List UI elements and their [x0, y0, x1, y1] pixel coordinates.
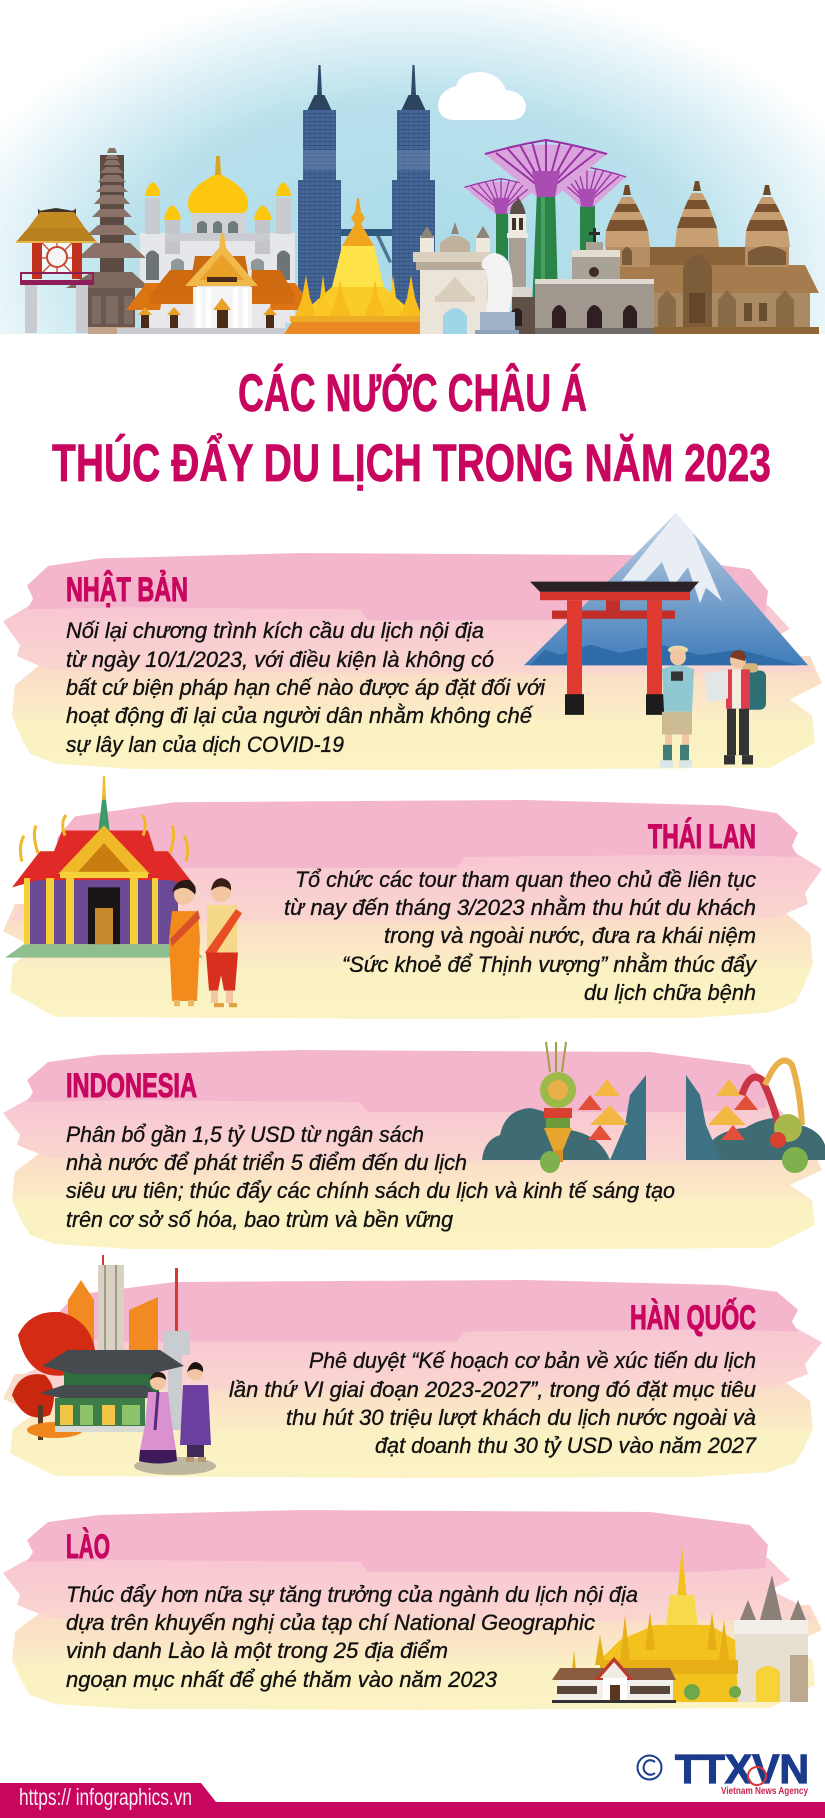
Patuxay arch: [413, 222, 490, 334]
white cloud: [438, 72, 526, 120]
body text: sự lây lan của dịch COVID-19: [66, 732, 344, 757]
couple in hanbok: [134, 1362, 216, 1475]
red pavilion: [16, 208, 97, 333]
heading: INDONESIA: [66, 1067, 197, 1105]
body text: bất cứ biện pháp hạn chế nào được áp đặt đối với: [66, 675, 546, 700]
body text: vinh danh Lào là một trong 25 địa điểm: [66, 1638, 448, 1663]
Shwedagon pagoda: [284, 198, 433, 334]
body text: trên cơ sở số hóa, bao trùm và bền vững: [66, 1207, 454, 1232]
panel: Nhật Bản: [3, 513, 822, 770]
panel: Lào: [3, 1510, 822, 1710]
footer bar with website: https:// infographics.vn: [19, 1784, 192, 1810]
body text: Nối lại chương trình kích cầu du lịch nội địa: [66, 618, 484, 643]
body text: từ ngày 10/1/2023, với điều kiện là không có: [66, 647, 494, 672]
hall: [552, 1657, 676, 1703]
Korean palace: [40, 1350, 184, 1432]
illustration: That Luang stupa, Patuxai and hall: [552, 1545, 808, 1703]
illustration: Thai temple and couple in traditional dress: [5, 776, 242, 1007]
tourist with map and backpack: [704, 650, 766, 764]
penjor decoration: [742, 1060, 808, 1173]
title: [52, 362, 771, 493]
title: CÁC NƯỚC CHÂU Á: [238, 362, 587, 423]
body text: [66, 1582, 638, 1692]
offering tower: [540, 1042, 576, 1173]
Patuxai gate: [734, 1575, 808, 1702]
faded cloud top left: [33, 9, 114, 46]
body text: [284, 867, 758, 1005]
brush background: [3, 1280, 822, 1478]
faded cloud top right: [693, 7, 791, 46]
brush background: [3, 1050, 822, 1250]
illustration: Seoul skyline, palace and couple in hanbok: [12, 1255, 216, 1475]
left tower: [605, 185, 650, 247]
That Luang stupa: [571, 1545, 741, 1702]
body text: trong và ngoài nước, đưa ra khái niệm: [384, 923, 756, 948]
heading: HÀN QUỐC: [630, 1298, 756, 1337]
panel: Indonesia: [3, 1042, 825, 1250]
heading: NHẬT BẢN: [66, 571, 188, 609]
body text: [229, 1348, 757, 1458]
panel: Hàn Quốc: [3, 1255, 822, 1478]
body text: nhà nước để phát triển 5 điểm đến du lịch: [66, 1150, 467, 1175]
right tower: [745, 185, 790, 247]
body text: “Sức khoẻ để Thịnh vượng” nhằm thúc đẩy: [342, 952, 758, 977]
brush background: [3, 1510, 822, 1710]
panel: Thái Lan: [3, 776, 822, 1019]
footer bar with website: [0, 1783, 825, 1818]
illustration: Balinese gate and offerings: [482, 1042, 825, 1173]
umbrellas: [578, 1079, 758, 1140]
heading: THÁI LAN: [648, 818, 756, 856]
Singapore supertrees: [464, 140, 626, 334]
mosque: [140, 156, 295, 323]
body text: từ nay đến tháng 3/2023 nhằm thu hút du khách: [284, 895, 756, 920]
centre tower: [675, 181, 719, 247]
Thai temple: [117, 233, 316, 334]
sky background: [0, 0, 825, 334]
brush background: [3, 800, 822, 1019]
Petronas towers: [298, 65, 435, 334]
body text: Phê duyệt “Kế hoạch cơ bản về xúc tiến du lịch: [309, 1348, 756, 1373]
brush background: [3, 553, 822, 770]
church: [535, 228, 654, 334]
TTXVN logo: TTXVN: [675, 1746, 809, 1792]
pagoda: [66, 148, 150, 334]
man in red and yellow costume: [205, 878, 242, 1007]
body text: Thúc đẩy hơn nữa sự tăng trưởng của ngành du lịch nội địa: [66, 1582, 638, 1607]
body text: ngoạn mục nhất để ghé thăm vào năm 2023: [66, 1667, 498, 1692]
agency name: Vietnam News Agency: [721, 1786, 808, 1797]
body text: [66, 618, 546, 757]
body text: [66, 1122, 675, 1232]
body text: lần thứ VI giai đoạn 2023-2027”, trong đó đặt mục tiêu: [229, 1377, 756, 1402]
tourist with camera: [660, 646, 694, 768]
body text: hoạt động đi lại của người dân nhằm không chế: [66, 703, 534, 728]
woman in orange dress: [169, 880, 200, 1006]
copyright symbol: [638, 1756, 662, 1780]
body text: đạt doanh thu 30 tỷ USD vào năm 2027: [375, 1433, 757, 1458]
Merlion statue: [475, 253, 519, 334]
body text: thu hút 30 triệu lượt khách du lịch nước ngoài và: [286, 1405, 756, 1430]
heading: LÀO: [66, 1528, 110, 1566]
body text: du lịch chữa bệnh: [584, 980, 756, 1005]
illustration: Mount Fuji, torii gate and tourists: [524, 513, 808, 768]
body text: dựa trên khuyến nghị của tạp chí National Geographic: [66, 1610, 595, 1635]
Angkor Wat: [605, 181, 819, 334]
header illustration: Asian landmarks skyline: [0, 0, 825, 334]
body text: siêu ưu tiên; thúc đẩy các chính sách du lịch và kinh tế sáng tạo: [66, 1178, 675, 1203]
red maple trees: [12, 1312, 95, 1440]
globe icon: [748, 1767, 766, 1785]
body text: Phân bổ gần 1,5 tỷ USD từ ngân sách: [66, 1122, 424, 1147]
clock tower: [507, 196, 535, 334]
body text: Tổ chức các tour tham quan theo chủ đề liên tục: [295, 867, 756, 892]
